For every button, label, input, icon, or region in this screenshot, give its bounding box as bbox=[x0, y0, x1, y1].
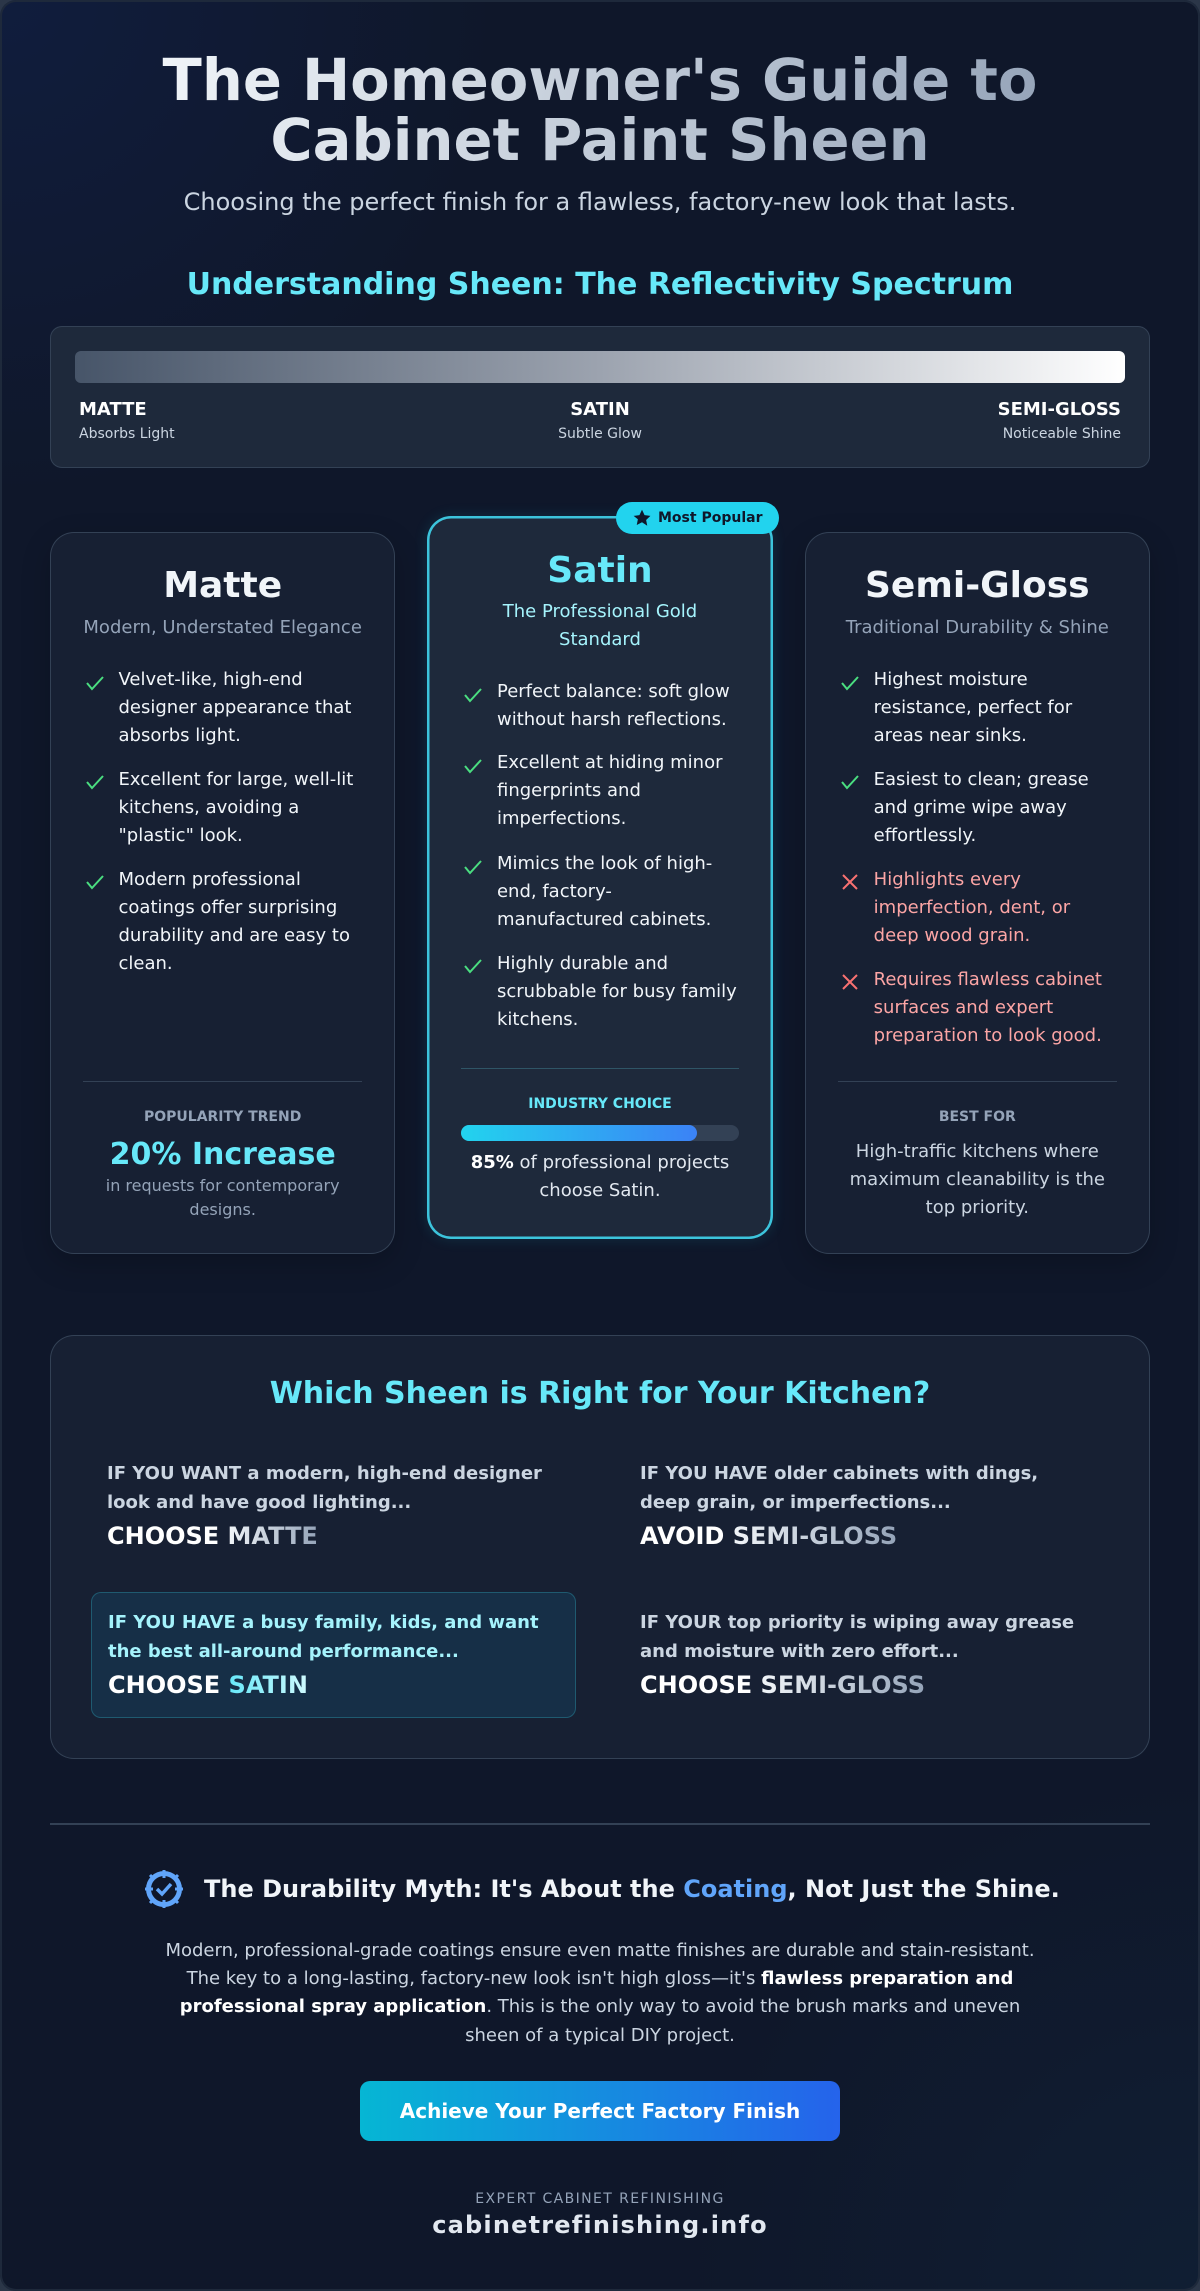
drawback text: imperfection, dent, or bbox=[874, 897, 1070, 918]
label: satin: Subtle Glow bbox=[558, 426, 642, 442]
label: matte: MATTE bbox=[79, 399, 147, 420]
decision text bbox=[108, 1612, 539, 1699]
feature text bbox=[118, 869, 350, 974]
label: matte bbox=[79, 399, 175, 442]
feature text: end, factory- bbox=[497, 881, 612, 902]
decision: matte: CHOOSE MATTE bbox=[107, 1522, 318, 1550]
progress fill bbox=[461, 1125, 697, 1141]
stat caption bbox=[106, 1176, 340, 1219]
label: popularity trend: POPULARITY TREND bbox=[144, 1109, 301, 1125]
label: best for: BEST FOR bbox=[939, 1109, 1016, 1125]
feature text: Velvet-like, high-end bbox=[118, 669, 303, 690]
feature text bbox=[497, 953, 737, 1030]
feature text: Easiest to clean; grease bbox=[874, 769, 1089, 790]
feature text: designer appearance that bbox=[118, 697, 351, 718]
best for text: maximum cleanability is the bbox=[850, 1169, 1105, 1190]
stat caption: 85% of professional projects bbox=[471, 1152, 729, 1173]
panel: semi-gloss card bbox=[805, 532, 1150, 1254]
decision text: IF YOU HAVE a busy family, kids, and want bbox=[108, 1612, 539, 1633]
label: satin bbox=[558, 399, 642, 442]
decision: matte bbox=[107, 1463, 542, 1550]
feature text bbox=[118, 669, 351, 746]
icon: check bbox=[86, 775, 104, 790]
feature text: imperfections. bbox=[497, 808, 626, 829]
label: satin: SATIN bbox=[570, 399, 630, 420]
feature text: fingerprints and bbox=[497, 780, 641, 801]
drawback text bbox=[874, 969, 1102, 1046]
icon: check bbox=[86, 875, 104, 890]
drawback text: deep wood grain. bbox=[874, 925, 1030, 946]
decision text: the best all-around performance... bbox=[108, 1640, 459, 1662]
heading: which sheen: Which Sheen is Right for Your Kitchen? bbox=[270, 1376, 930, 1411]
paragraph: durability explanation: professional spray application. This is the only way to avoid the brush marks and uneven bbox=[180, 1996, 1020, 2017]
paragraph: durability explanation bbox=[165, 1940, 1035, 2046]
feature text: resistance, perfect for bbox=[874, 697, 1072, 718]
decision: semi-gloss bbox=[640, 1612, 1074, 1699]
button: call to action bbox=[360, 2081, 840, 2141]
tagline: Traditional Durability & Shine bbox=[846, 617, 1109, 638]
decision text: CHOOSE SATIN bbox=[108, 1671, 308, 1699]
feature text: manufactured cabinets. bbox=[497, 909, 711, 930]
feature text bbox=[497, 752, 723, 829]
decision: matte: look and have good lighting... bbox=[107, 1492, 411, 1512]
feature text bbox=[874, 769, 1089, 846]
best for text bbox=[850, 1141, 1105, 1218]
heading: reflectivity spectrum: Understanding Sheen: The Reflectivity Spectrum bbox=[187, 267, 1013, 302]
panel: satin card bbox=[427, 516, 773, 1239]
icon: durability badge bbox=[145, 1870, 183, 1908]
feature text: Perfect balance: soft glow bbox=[497, 681, 730, 702]
icon: check bbox=[841, 676, 859, 690]
drawback text bbox=[874, 869, 1070, 946]
icon: check bbox=[464, 860, 482, 874]
paragraph: durability explanation: The key to a long-lasting, factory-new look isn't high gloss—it's flawless preparation and bbox=[187, 1968, 1013, 1989]
title: Cabinet Paint Sheen bbox=[270, 107, 930, 174]
subtitle: Choosing the perfect finish for a flawless, factory-new look that lasts. bbox=[184, 188, 1016, 216]
icon: check bbox=[86, 676, 104, 690]
feature text: Excellent for large, well-lit bbox=[118, 769, 353, 790]
icon: check bbox=[464, 959, 482, 974]
progress bar: 85% bbox=[461, 1125, 739, 1141]
decision: semi-gloss: and moisture with zero effort... bbox=[640, 1640, 959, 1662]
footer: tagline: EXPERT CABINET REFINISHING bbox=[475, 2191, 725, 2207]
icon: check bbox=[841, 775, 859, 790]
feature text: effortlessly. bbox=[874, 825, 976, 846]
decision: avoid semi-gloss: AVOID SEMI-GLOSS bbox=[640, 1522, 897, 1550]
icon: star bbox=[634, 510, 650, 526]
feature text: durability and are easy to bbox=[118, 925, 350, 946]
badge: most popular bbox=[616, 502, 779, 534]
drawback text: Requires flawless cabinet bbox=[874, 969, 1102, 990]
tagline: Modern, Understated Elegance bbox=[83, 617, 362, 638]
label: semi-gloss: SEMI-GLOSS bbox=[998, 399, 1121, 420]
tagline bbox=[502, 601, 697, 650]
decision: avoid semi-gloss: deep grain, or imperfections... bbox=[640, 1492, 951, 1512]
feature text: Highest moisture bbox=[874, 669, 1028, 690]
drawback text: Highlights every bbox=[874, 869, 1021, 890]
decision: semi-gloss: CHOOSE SEMI-GLOSS bbox=[640, 1671, 925, 1699]
feature text bbox=[118, 769, 353, 846]
stat caption: designs. bbox=[189, 1200, 256, 1219]
paragraph: durability explanation: Modern, professional-grade coatings ensure even matte finishes are durable and stain-resistant. bbox=[165, 1940, 1035, 1961]
panel: which sheen decision guide bbox=[50, 1335, 1150, 1759]
feature text: areas near sinks. bbox=[874, 725, 1027, 746]
feature text: without harsh reflections. bbox=[497, 709, 727, 730]
decision: avoid semi-gloss bbox=[640, 1463, 1038, 1550]
feature text: "plastic" look. bbox=[118, 825, 243, 846]
heading: semi-gloss: Semi-Gloss bbox=[865, 565, 1090, 606]
feature text: Excellent at hiding minor bbox=[497, 752, 722, 773]
feature text: kitchens. bbox=[497, 1009, 578, 1030]
feature text: and grime wipe away bbox=[874, 797, 1067, 818]
tagline: Standard bbox=[559, 629, 641, 650]
footer: website: cabinetrefinishing.info bbox=[432, 2211, 768, 2239]
button: call to action: Achieve Your Perfect Factory Finish bbox=[400, 2099, 800, 2123]
feature text: clean. bbox=[118, 953, 173, 974]
title bbox=[150, 51, 1050, 171]
tagline: The Professional Gold bbox=[503, 601, 697, 622]
heading: durability myth: The Durability Myth: It's About the Coating, Not Just the Shine. bbox=[204, 1875, 1060, 1903]
feature text: coatings offer surprising bbox=[118, 897, 337, 918]
feature text: Modern professional bbox=[118, 869, 301, 890]
feature text: Highly durable and bbox=[497, 953, 668, 974]
stat caption bbox=[471, 1152, 729, 1201]
best for text: High-traffic kitchens where bbox=[856, 1141, 1099, 1162]
heading: satin: Satin bbox=[547, 550, 653, 591]
best for text: top priority. bbox=[926, 1197, 1029, 1218]
stat caption: choose Satin. bbox=[539, 1180, 661, 1201]
feature text: Mimics the look of high- bbox=[497, 853, 712, 874]
decision: matte: IF YOU WANT a modern, high-end designer bbox=[107, 1463, 542, 1484]
title: The Homeowner's Guide to bbox=[163, 47, 1037, 114]
label: industry choice: INDUSTRY CHOICE bbox=[528, 1096, 672, 1112]
label: semi-gloss: Noticeable Shine bbox=[1003, 426, 1121, 442]
heading: matte: Matte bbox=[163, 565, 282, 606]
decision: satin highlight bbox=[91, 1592, 576, 1718]
decision: semi-gloss: IF YOUR top priority is wiping away grease bbox=[640, 1612, 1074, 1633]
icon: cross bbox=[842, 874, 858, 890]
spectrum gradient bar bbox=[75, 351, 1125, 383]
feature text: kitchens, avoiding a bbox=[118, 797, 299, 818]
icon: cross bbox=[842, 974, 858, 990]
icon: check bbox=[464, 759, 482, 774]
label: semi-gloss bbox=[998, 399, 1121, 442]
stat: 20% increase: 20% Increase bbox=[110, 1137, 336, 1172]
stat caption: in requests for contemporary bbox=[106, 1176, 340, 1195]
icon: check bbox=[464, 688, 482, 702]
badge: most popular: Most Popular bbox=[658, 510, 762, 526]
panel: sheen spectrum bbox=[50, 326, 1150, 468]
drawback text: surfaces and expert bbox=[874, 997, 1053, 1018]
feature text bbox=[874, 669, 1072, 746]
feature text: scrubbable for busy family bbox=[497, 981, 737, 1002]
label: matte: Absorbs Light bbox=[79, 426, 175, 442]
feature text bbox=[497, 853, 712, 930]
paragraph: durability explanation: sheen of a typical DIY project. bbox=[465, 2025, 735, 2046]
feature text bbox=[497, 681, 730, 730]
feature text: absorbs light. bbox=[118, 725, 241, 746]
drawback text: preparation to look good. bbox=[874, 1025, 1102, 1046]
panel: matte card bbox=[50, 532, 395, 1254]
decision: avoid semi-gloss: IF YOU HAVE older cabinets with dings, bbox=[640, 1463, 1038, 1484]
